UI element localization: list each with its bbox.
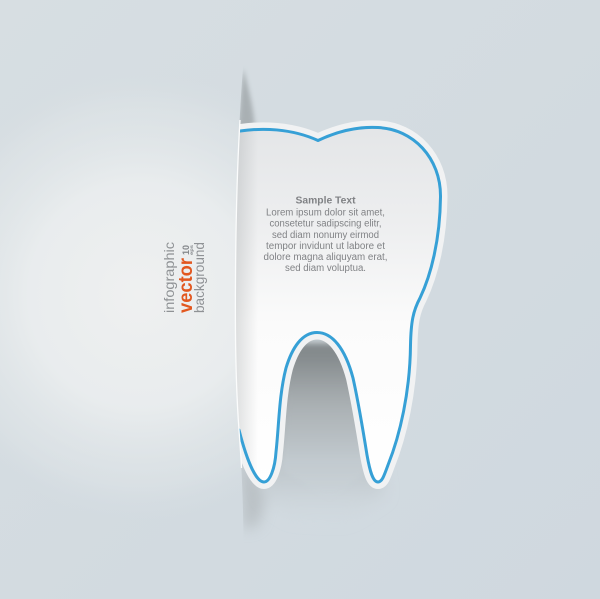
sheet: soft glow [0,125,239,472]
body text: tempor invidunt ut labore et [266,241,385,252]
heading: sample text: Sample Text [296,194,356,206]
body text: Lorem ipsum dolor sit amet, [266,208,385,218]
body text: sed diam nonumy eirmod [272,230,379,241]
shadow beside the sheet edge [238,68,268,530]
body text: sed diam voluptua. [285,263,366,274]
front sheet [0,72,243,526]
label: background: background [192,242,207,313]
label: vector: vector [176,257,197,313]
tooth [225,120,441,490]
body text: consetetur sadipscing elitr, [270,218,382,230]
tooth: shade from the sheet [236,132,252,464]
label: version 10: 10 [181,245,191,255]
body text: dolore magna aliquyam erat, [264,252,388,263]
tooth: blue outline [225,127,441,482]
tooth: pale rim [225,127,441,482]
label: infographic: infographic [162,242,177,313]
logo text [162,242,207,313]
shadow of tooth roots [262,345,385,525]
text block [264,194,388,274]
sheet: lit edge [235,120,242,468]
tooth: white body [225,127,441,482]
label: eps: eps [189,244,194,255]
body text [264,208,388,274]
